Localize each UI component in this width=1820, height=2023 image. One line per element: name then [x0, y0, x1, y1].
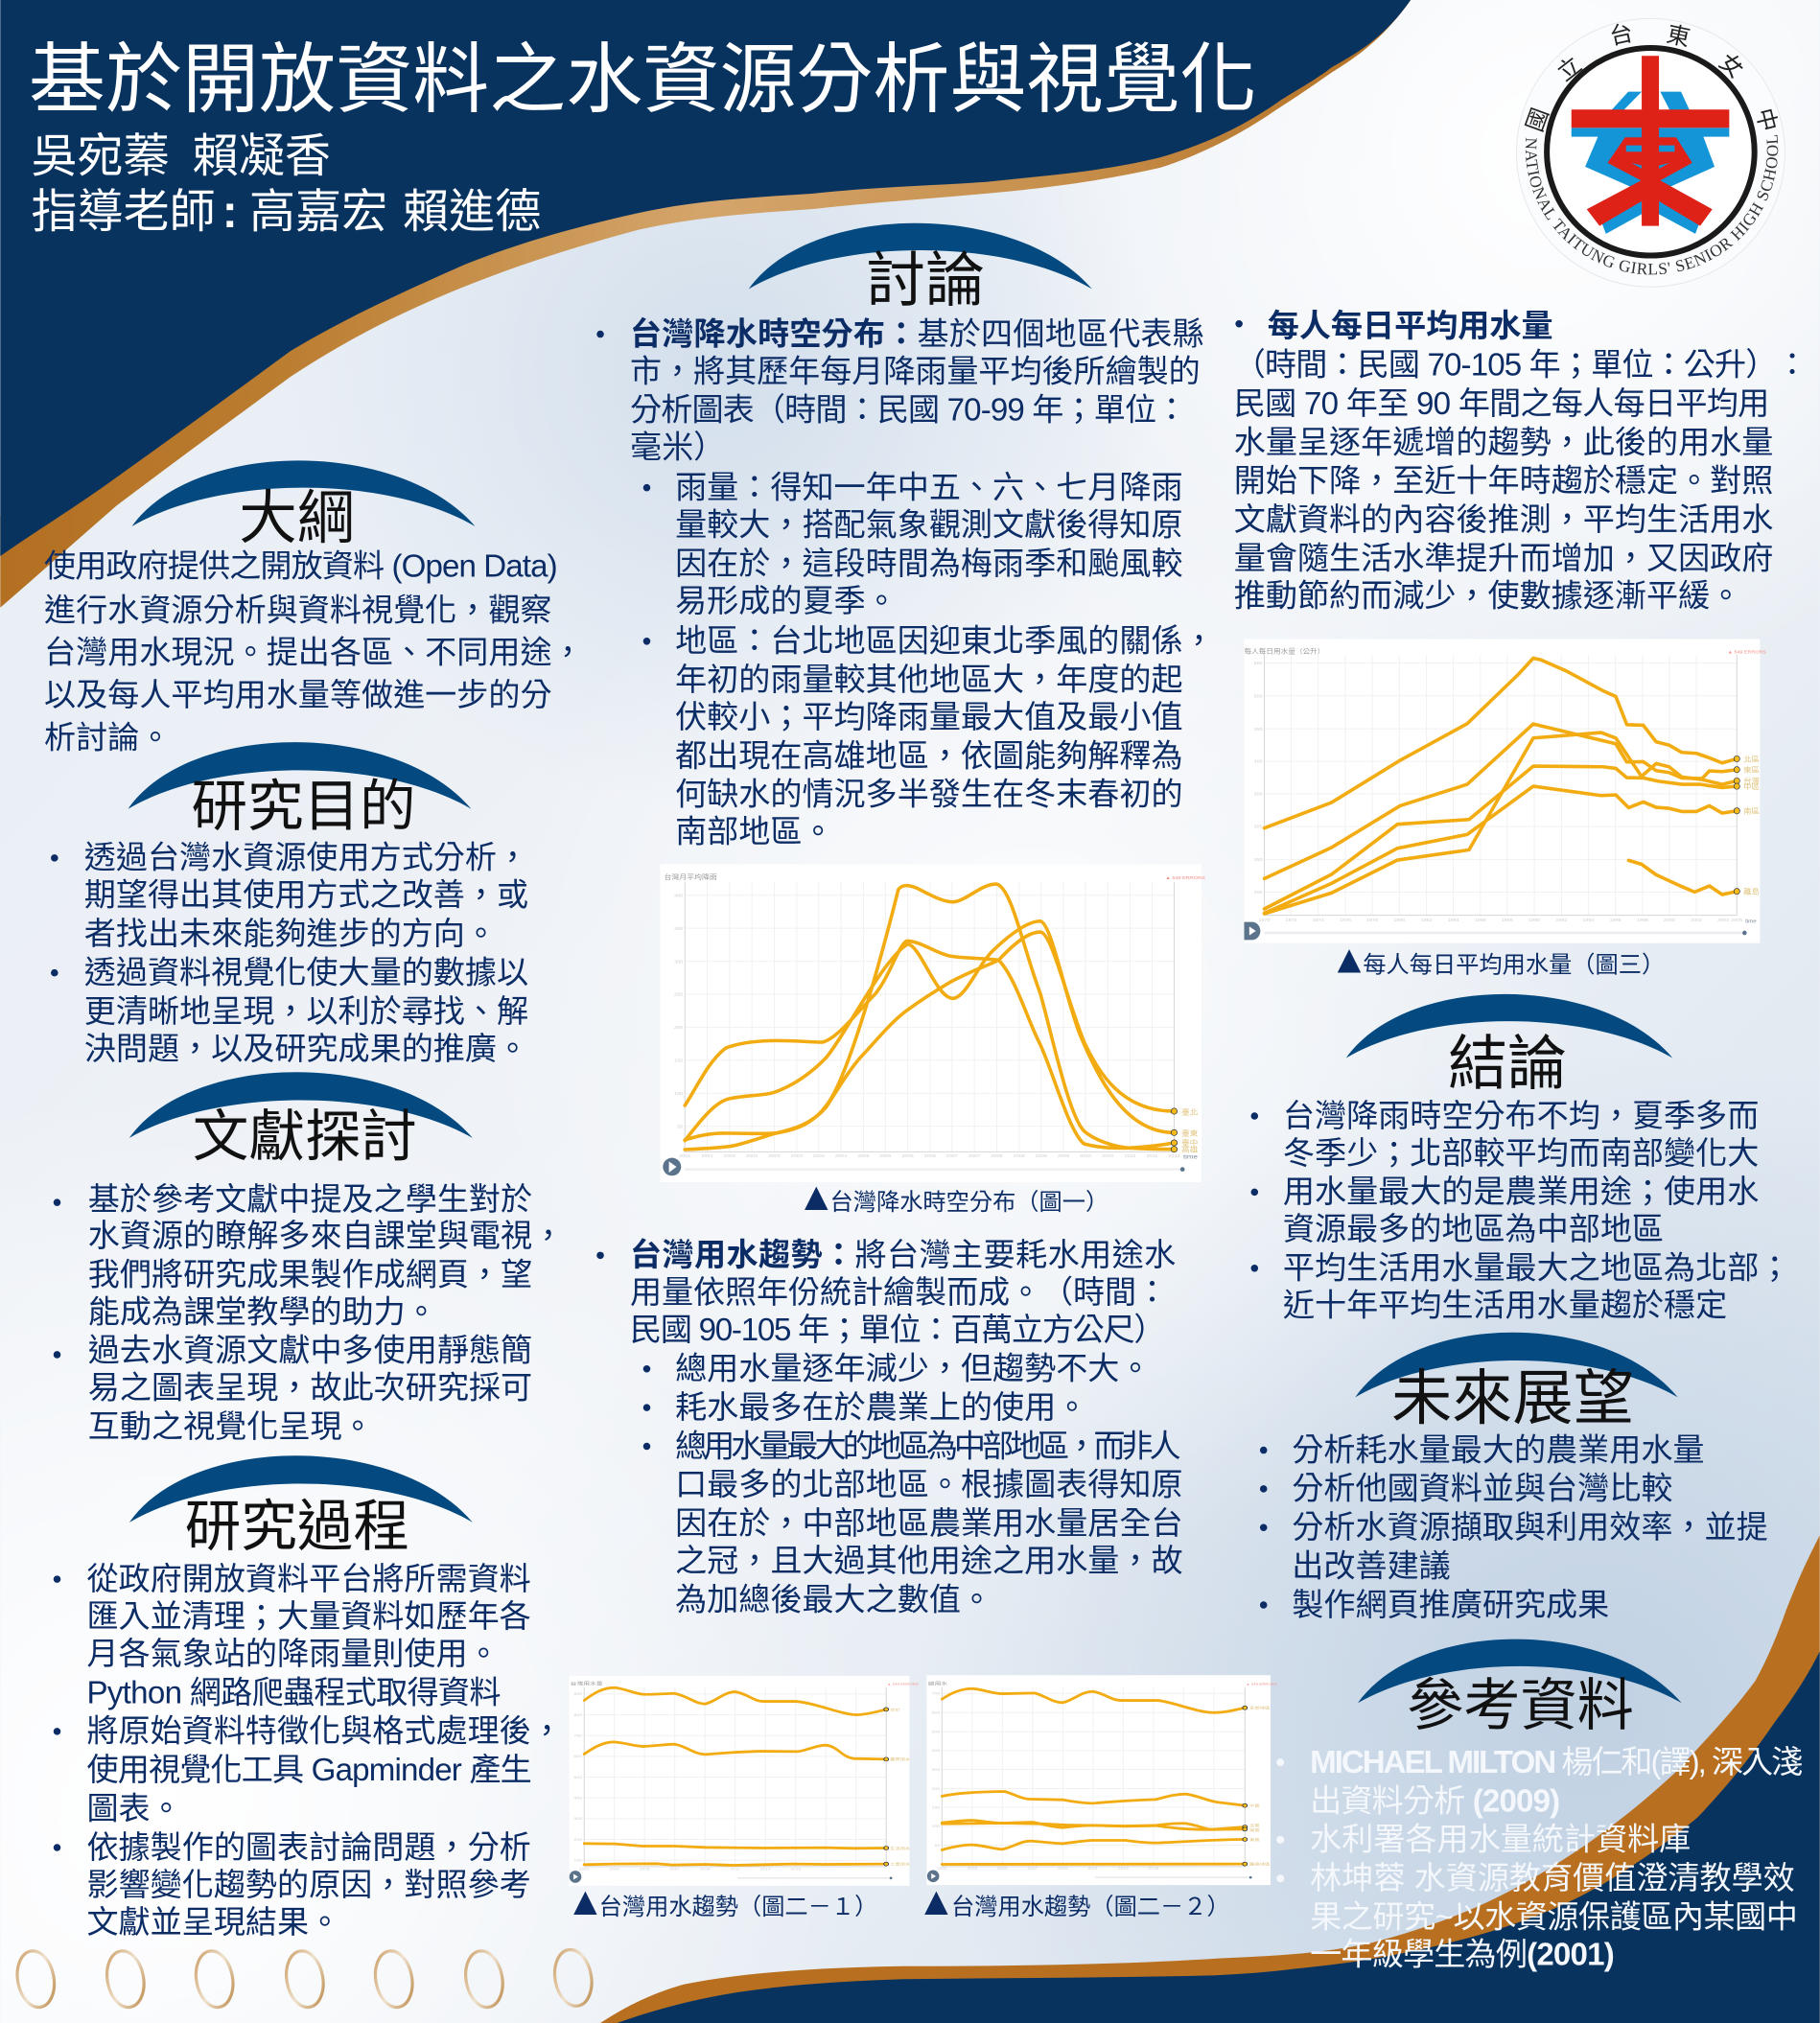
panel: outline: 析討論。: [44, 720, 171, 756]
chart: daily water use per person: 中區: [1743, 782, 1760, 791]
chart: daily water use per person: 1988: [1502, 918, 1513, 923]
panel: future outlook: 製作網頁推廣研究成果: [1292, 1588, 1609, 1623]
caption: figure 3: ▲: [1329, 937, 1369, 982]
panel: conclusion: 台灣降雨時空分布不均，夏季多而: [1283, 1099, 1759, 1134]
panel: literature review: 水資源的瞭解多來自課堂與電視，: [88, 1219, 564, 1254]
panel: daily water use text: 民國 70 年至 90 年間之每人每日平均用: [1234, 386, 1769, 422]
chart: Taiwan rainfall distribution: 2011: [1147, 1153, 1158, 1159]
panel: references: 林坤蓉 水資源教育價值澄清教學效: [1310, 1861, 1795, 1896]
panel: references: 果之研究~以水資源保護區內某國中: [1310, 1899, 1798, 1935]
title: 基於開放資料之水資源分析與視覺化: [29, 36, 1257, 122]
chart: water trend figure 2-1: 800: [573, 1713, 583, 1717]
chart: daily water use per person: 250: [1254, 857, 1263, 863]
panel: water use trend text: 台灣用水趨勢：將台灣主要耗水用途水: [630, 1237, 1176, 1273]
chart: Taiwan rainfall distribution: 2002: [746, 1153, 758, 1159]
chart: water trend figure 2-1: 2009: [700, 1867, 711, 1871]
chart: daily water use per person: 1992: [1555, 918, 1568, 923]
panel: research process: 影響變化趨勢的原因，對照參考: [86, 1868, 531, 1903]
chart: Taiwan rainfall distribution: 2002: [724, 1153, 735, 1159]
chart: daily water use per person: 1976: [1340, 918, 1351, 923]
icon: school logo: 台: [1607, 20, 1635, 50]
chart: water trend figure 2-2: 50: [934, 1844, 941, 1848]
caption: figure 3: 每人每日平均用水量（圖三）: [1363, 953, 1665, 979]
chart: water trend figure 2-2: 2007: [1027, 1867, 1038, 1871]
chart: water trend figure 2-2: 2001: [937, 1867, 948, 1871]
chart: water trend figure 2-2: 700: [932, 1691, 941, 1695]
panel: future outlook: 未來展望: [1391, 1365, 1634, 1432]
chart: water trend figure 2-2: 總用水: [928, 1681, 947, 1686]
chart: Taiwan rainfall distribution: 臺東: [1181, 1128, 1198, 1137]
chart: water trend figure 2-2: 400: [932, 1749, 941, 1753]
chart: water trend figure 2-2: 100: [932, 1825, 941, 1828]
panel: future outlook: 分析他國資料並與台灣比較: [1292, 1472, 1672, 1507]
panel: research purpose: 研究目的: [192, 776, 416, 838]
chart: Taiwan rainfall distribution: ▲ 549 ERRORS: [1165, 875, 1205, 881]
panel: water use trend text: 民國 90-105 年；單位：百萬立方公尺）: [630, 1313, 1165, 1348]
panel: water use trend text: 之冠，且大過其他用途之用水量，故: [675, 1544, 1183, 1579]
caption: figure 2-1: 台灣用水趨勢（圖二－１）: [599, 1895, 877, 1920]
panel: research process: 從政府開放資料平台將所需資料: [86, 1562, 531, 1597]
chart: water trend figure 2-2: 2009: [1058, 1867, 1069, 1871]
panel: outline: 使用政府提供之開放資料 (Open Data): [44, 549, 558, 585]
panel: water use trend text: 口最多的北部地區。根據圖表得知原: [675, 1468, 1183, 1503]
chart: daily water use per person: 2004: [1717, 918, 1729, 923]
chart: Taiwan rainfall distribution: 100: [674, 1091, 683, 1097]
chart: water trend figure 2-1: 200: [573, 1838, 583, 1842]
icon: school logo: NATIONAL TAITUNG GIRLS' SENIOR HIGH SCHOOL: [1525, 134, 1778, 274]
chart: daily water use per person: 每人每日用水量（公升）: [1244, 647, 1324, 655]
panel: research purpose: 決問題，以及研究成果的推廣。: [84, 1032, 528, 1067]
chart: Taiwan rainfall distribution: 2001: [701, 1153, 713, 1159]
chart: daily water use per person: 450: [1254, 727, 1263, 732]
advisors: 賴進德: [403, 187, 541, 238]
advisors: 高嘉宏: [249, 187, 387, 238]
chart: daily water use per person: 200: [1254, 890, 1263, 895]
chart: water trend figure 2-1: 700: [573, 1733, 583, 1737]
panel: conclusion: 近十年平均生活用水量趨於穩定: [1283, 1289, 1727, 1324]
chart: daily water use per person: 2002: [1691, 918, 1702, 923]
chart: water trend figure 2-1: 生活用水: [890, 1846, 911, 1850]
panel: research process: Python 網路爬蟲程式取得資料: [86, 1675, 501, 1710]
panel: research purpose: 更清晰地呈現，以利於尋找、解: [84, 994, 528, 1030]
chart: water trend figure 2-2: 中區: [1249, 1803, 1260, 1808]
icon: school logo: 國: [1522, 105, 1554, 135]
panel: daily water use text: [1234, 309, 1808, 614]
icon: school logo: 中: [1751, 105, 1782, 134]
chart: daily water use per person: 2000: [1664, 918, 1675, 923]
chart: water trend figure 2-2: 600: [932, 1710, 941, 1714]
panel: discussion: 討論: [866, 248, 985, 314]
chart: Taiwan rainfall distribution: 150: [674, 1058, 683, 1063]
chart: water trend figure 2-2: 300: [932, 1768, 941, 1772]
chart: Taiwan rainfall distribution: 400: [674, 894, 683, 898]
chart: Taiwan rainfall distribution: 2006: [924, 1153, 936, 1159]
icon: school logo: 立: [1552, 52, 1587, 86]
chart: daily water use per person: 1986: [1475, 918, 1486, 923]
chart: water trend figure 2-2: 150: [932, 1805, 941, 1809]
panel: conclusion: 結論: [1448, 1031, 1567, 1097]
chart: water trend figure 2-1: 500: [573, 1776, 583, 1779]
panel: conclusion: 冬季少；北部較平均而南部變化大: [1283, 1136, 1759, 1172]
icon: school logo: 女: [1714, 49, 1748, 83]
panel: literature review: 過去水資源文獻中多使用靜態簡: [88, 1334, 532, 1369]
chart: daily water use per person: 1994: [1582, 918, 1595, 923]
chart: Taiwan rainfall distribution: 臺中: [1181, 1138, 1198, 1147]
chart: water trend figure 2-2: 2011: [1088, 1867, 1099, 1871]
chart: daily water use per person: 2005: [1731, 918, 1742, 923]
chart: Taiwan rainfall distribution: 2004: [813, 1153, 825, 1159]
icon: school logo: 東: [1665, 21, 1692, 52]
chart: daily water use per person: 1978: [1366, 918, 1378, 923]
chart: daily water use per person: 南區: [1743, 806, 1760, 816]
panel: future outlook: [1260, 1333, 1768, 1623]
chart: Taiwan rainfall distribution: time: [1183, 1152, 1198, 1160]
chart: Taiwan rainfall distribution: 2001: [679, 1153, 691, 1159]
chart: Taiwan rainfall distribution: 300: [674, 960, 683, 965]
chart: daily water use per person: 離島: [1743, 887, 1760, 896]
panel: water use trend text: 耗水最多在於農業上的使用。: [675, 1390, 1087, 1426]
panel: discussion: 分析圖表（時間：民國 70-99 年；單位：: [630, 393, 1187, 429]
caption: figure 2-1: ▲: [566, 1878, 605, 1923]
panel: discussion: 南部地區。: [675, 815, 834, 850]
panel: research process: [54, 1455, 563, 1941]
panel: water use trend text: 總用水量最大的地區為中部地區，而非人: [675, 1429, 1181, 1464]
authors: 吳宛蓁: [32, 131, 170, 182]
chart: water trend figure 2-2: 2005: [997, 1867, 1009, 1871]
panel: research process: 月各氣象站的降雨量則使用。: [86, 1637, 500, 1672]
panel: literature review: 能成為課堂教學的助力。: [88, 1294, 437, 1330]
chart: daily water use per person: time: [1745, 919, 1757, 924]
panel: conclusion: [1251, 994, 1790, 1324]
panel: references: MICHAEL MILTON 楊仁和(譯), 深入淺: [1310, 1745, 1803, 1780]
panel: references: 出資料分析 (2009): [1310, 1783, 1560, 1819]
chart: daily water use per person: ▲ 549 ERRORS: [1728, 650, 1766, 655]
panel: water use trend text: 用量依照年份統計繪製而成。（時間：: [630, 1275, 1168, 1311]
panel: research purpose: [51, 742, 528, 1067]
chart: daily water use per person: 350: [1254, 792, 1263, 798]
chart: daily water use per person: 台灣: [1743, 777, 1760, 785]
panel: outline: 大綱: [239, 485, 355, 550]
panel: daily water use text: 水量呈逐年遞增的趨勢，此後的用水量: [1234, 425, 1773, 460]
panel: discussion: 毫米）: [630, 430, 725, 466]
chart: Taiwan rainfall distribution: 2009: [1036, 1153, 1047, 1159]
panel: daily water use text: （時間：民國 70-105 年；單位：公升）：: [1234, 348, 1808, 384]
chart: Taiwan rainfall distribution: 2005: [857, 1153, 870, 1159]
chart: daily water use per person: 東區: [1743, 765, 1760, 775]
chart: water trend figure 2-1: 2003: [609, 1867, 620, 1871]
advisors: :: [222, 187, 238, 238]
bottom-right navy wave with orange band: [600, 1535, 1820, 2023]
decorative rings row: [13, 1946, 595, 2011]
panel: conclusion: 用水量最大的是農業用途；使用水: [1283, 1174, 1759, 1210]
chart: water trend figure 2-2: 南區: [1249, 1827, 1260, 1832]
panel: outline: 台灣用水現況。提出各區、不同用途，: [44, 636, 584, 671]
chart: water trend figure 2-1: 100: [573, 1858, 583, 1862]
chart: water trend figure 2-1: 工業用水: [890, 1861, 911, 1867]
chart: water trend figure 2-1: 合計: [890, 1708, 900, 1712]
panel: discussion: 量較大，搭配氣象觀測文獻後得知原: [675, 507, 1183, 543]
chart: water trend figure 2-1: 400: [573, 1796, 583, 1800]
chart: daily water use per person: 550: [1254, 661, 1263, 666]
panel: future outlook: 出改善建議: [1292, 1548, 1451, 1584]
chart: water trend figure 2-2: 東區: [1249, 1837, 1260, 1842]
chart: water trend figure 2-2: 200: [932, 1787, 941, 1791]
panel: research process: 將原始資料特徵化與格式處理後，: [86, 1714, 563, 1750]
chart: water trend figure 2-1: [570, 1676, 919, 1886]
chart: water trend figure 2-1: 300: [573, 1817, 583, 1821]
panel: research process: 匯入並清理；大量資料如歷年各: [86, 1599, 531, 1635]
chart: Taiwan rainfall distribution: 2007: [968, 1153, 980, 1159]
panel: literature review: 我們將研究成果製作成網頁，望: [88, 1257, 532, 1292]
panel: discussion: 年初的雨量較其他地區大，年度的起: [675, 663, 1183, 698]
chart: Taiwan rainfall distribution: 台灣月平均降雨: [664, 873, 717, 881]
panel: water use trend text: 因在於，中部地區農業用水量居全台: [675, 1506, 1183, 1542]
panel: research process: 依據製作的圖表討論問題，分析: [86, 1830, 531, 1866]
panel: literature review: 易之圖表呈現，故此次研究採可: [88, 1371, 532, 1407]
top-left navy wave with tan band: [0, 0, 1411, 608]
panel: conclusion: 資源最多的地區為中部地區: [1283, 1212, 1664, 1247]
advisors: 指導老師: [32, 187, 216, 238]
panel: research process: 文獻並呈現結果。: [86, 1905, 340, 1941]
panel: research purpose: 透過台灣水資源使用方式分析，: [84, 841, 528, 876]
chart: water trend figure 2-1: 2015: [790, 1867, 802, 1871]
chart: Taiwan rainfall distribution: 2010: [1080, 1153, 1091, 1159]
chart: Taiwan rainfall distribution: 臺北: [1181, 1107, 1198, 1116]
chart: Taiwan rainfall distribution: 2004: [835, 1153, 847, 1159]
chart: Taiwan rainfall distribution: 2012: [1168, 1153, 1180, 1159]
panel: discussion: 地區：台北地區因迎東北季風的關係，: [675, 624, 1215, 660]
chart: daily water use per person: 1970: [1259, 918, 1271, 923]
chart: Taiwan rainfall distribution: 2005: [879, 1153, 892, 1159]
panel: discussion: 雨量：得知一年中五、六、七月降雨: [675, 470, 1183, 505]
chart: daily water use per person: 1972: [1285, 918, 1297, 923]
chart: daily water use per person: 1980: [1393, 918, 1405, 923]
chart: water trend figure 2-1: 2013: [760, 1867, 771, 1871]
chart: Taiwan rainfall distribution: 2011: [1125, 1153, 1136, 1159]
panel: research process: 圖表。: [86, 1791, 182, 1826]
chart: Taiwan rainfall distribution: 2006: [901, 1153, 914, 1159]
panel: research purpose: 透過資料視覺化使大量的數據以: [84, 955, 528, 990]
chart: Taiwan rainfall distribution: 2003: [768, 1153, 781, 1159]
chart: water trend figure 2-2: 全部地區: [1249, 1706, 1271, 1710]
chart: water trend figure 2-1: 2011: [731, 1867, 741, 1871]
panel: daily water use text: 開始下降，至近十年時趨於穩定。對照: [1234, 464, 1773, 500]
chart: Taiwan rainfall distribution: 2010: [1102, 1153, 1114, 1159]
chart: water trend figure 2-1: 台灣用水量: [571, 1681, 603, 1686]
panel: references: 水利署各用水量統計資料庫: [1310, 1823, 1691, 1858]
chart: daily water use per person: 1996: [1610, 918, 1622, 923]
chart: water trend figure 2-2: 2015: [1148, 1867, 1159, 1871]
panel: outline: 進行水資源分析與資料視覺化，觀察: [44, 593, 552, 628]
panel: literature review: 文獻探討: [193, 1106, 417, 1169]
panel: water use trend text: [596, 1237, 1183, 1617]
panel: literature review: 互動之視覺化呈現。: [88, 1409, 374, 1445]
chart: water trend figure 2-2: [926, 1675, 1277, 1885]
caption: figure 2-2: 台灣用水趨勢（圖二－２）: [951, 1895, 1230, 1920]
panel: discussion: 市，將其歷年每月降雨量平均後所繪製的: [630, 354, 1201, 389]
chart: water trend figure 2-1: 2001: [579, 1867, 590, 1871]
panel: literature review: 基於參考文獻中提及之學生對於: [88, 1182, 532, 1218]
panel: daily water use text: 每人每日平均用水量: [1268, 309, 1553, 344]
chart: water trend figure 2-1: 2005: [640, 1867, 650, 1871]
chart: water trend figure 2-2: ▲ 549 ERRORS: [1246, 1683, 1277, 1686]
chart: daily water use per person: 400: [1254, 759, 1263, 765]
chart: Taiwan rainfall distribution: [661, 864, 1205, 1182]
panel: outline: 以及每人平均用水量等做進一步的分: [44, 678, 552, 713]
chart: Taiwan rainfall distribution: 250: [674, 992, 683, 998]
panel: discussion: 伏較小；平均降雨量最大值及最小值: [675, 700, 1183, 735]
chart: daily water use per person: 300: [1254, 825, 1263, 830]
panel: discussion: 都出現在高雄地區，依圖能夠解釋為: [675, 738, 1183, 774]
chart: Taiwan rainfall distribution: 200: [674, 1025, 683, 1031]
chart: water trend figure 2-2: 北區: [1249, 1823, 1260, 1827]
panel: research purpose: 期望得出其使用方式之改善，或: [84, 878, 528, 914]
chart: daily water use per person: 1990: [1528, 918, 1540, 923]
panel: discussion: 因在於，這段時間為梅雨季和颱風較: [675, 546, 1183, 582]
chart: Taiwan rainfall distribution: 2009: [1058, 1153, 1069, 1159]
panel: literature review: [54, 1072, 564, 1445]
authors: 賴凝香: [193, 131, 331, 182]
panel: references: 參考資料: [1407, 1673, 1634, 1737]
chart: Taiwan rainfall distribution: 2008: [991, 1153, 1003, 1159]
chart: Taiwan rainfall distribution: 2008: [1014, 1153, 1025, 1159]
panel: research process: 使用視覺化工具 Gapminder 產生: [86, 1753, 532, 1788]
chart: daily water use per person: [1244, 639, 1766, 943]
icon: school logo: [1516, 18, 1785, 288]
panel: daily water use text: 推動節約而減少，使數據逐漸平緩。: [1234, 578, 1741, 614]
panel: research purpose: 者找出未來能夠進步的方向。: [84, 917, 497, 952]
chart: daily water use per person: 1984: [1448, 918, 1459, 923]
panel: outline: [44, 460, 584, 756]
panel: discussion: 何缺水的情況多半發生在冬末春初的: [675, 778, 1183, 813]
panel: water use trend text: 總用水量逐年減少，但趨勢不大。: [675, 1352, 1151, 1387]
panel: conclusion: 平均生活用水量最大之地區為北部；: [1283, 1251, 1790, 1287]
chart: daily water use per person: 1974: [1313, 918, 1324, 923]
caption: figure 1: ▲: [797, 1174, 836, 1219]
chart: Taiwan rainfall distribution: 2007: [946, 1153, 958, 1159]
panel: discussion: 台灣降水時空分布：基於四個地區代表縣: [630, 315, 1204, 352]
panel: references: 一年級學生為例(2001): [1310, 1937, 1615, 1972]
chart: Taiwan rainfall distribution: 高雄: [1181, 1145, 1198, 1153]
panel: discussion: 易形成的夏季。: [675, 584, 898, 619]
panel: discussion: [596, 223, 1215, 850]
chart: water trend figure 2-1: 600: [573, 1755, 583, 1758]
panel: research process: 研究過程: [185, 1496, 409, 1558]
panel: water use trend text: 為加總後最大之數值。: [675, 1582, 992, 1617]
chart: daily water use per person: 1982: [1421, 918, 1433, 923]
panel: references: [1276, 1639, 1803, 1972]
caption: figure 2-2: ▲: [917, 1878, 956, 1923]
chart: water trend figure 2-1: 農業用水: [890, 1756, 911, 1762]
chart: Taiwan rainfall distribution: 50: [677, 1125, 683, 1129]
chart: Taiwan rainfall distribution: 350: [674, 926, 683, 932]
caption: figure 1: 台灣降水時空分布（圖一）: [830, 1190, 1108, 1216]
chart: daily water use per person: 500: [1254, 694, 1263, 699]
panel: future outlook: 分析水資源擷取與利用效率，並提: [1292, 1510, 1768, 1546]
panel: daily water use text: 量會隨生活水準提升而增加，又因政府: [1234, 541, 1773, 576]
chart: water trend figure 2-1: ▲ 549 ERRORS: [887, 1683, 919, 1686]
chart: daily water use per person: 1998: [1637, 918, 1648, 923]
chart: water trend figure 2-2: 500: [932, 1730, 941, 1733]
panel: daily water use text: 文獻資料的內容後推測，平均生活用水: [1234, 502, 1773, 538]
chart: water trend figure 2-2: 2013: [1118, 1867, 1130, 1871]
chart: water trend figure 2-2: 2003: [967, 1867, 978, 1871]
chart: water trend figure 2-2: 離島地區: [1249, 1861, 1271, 1867]
chart: water trend figure 2-1: 2007: [669, 1867, 681, 1871]
chart: daily water use per person: 北區: [1743, 756, 1760, 763]
chart: Taiwan rainfall distribution: 2003: [791, 1153, 803, 1159]
chart: water trend figure 2-1: 900: [573, 1692, 583, 1696]
panel: future outlook: 分析耗水量最大的農業用水量: [1292, 1432, 1705, 1468]
